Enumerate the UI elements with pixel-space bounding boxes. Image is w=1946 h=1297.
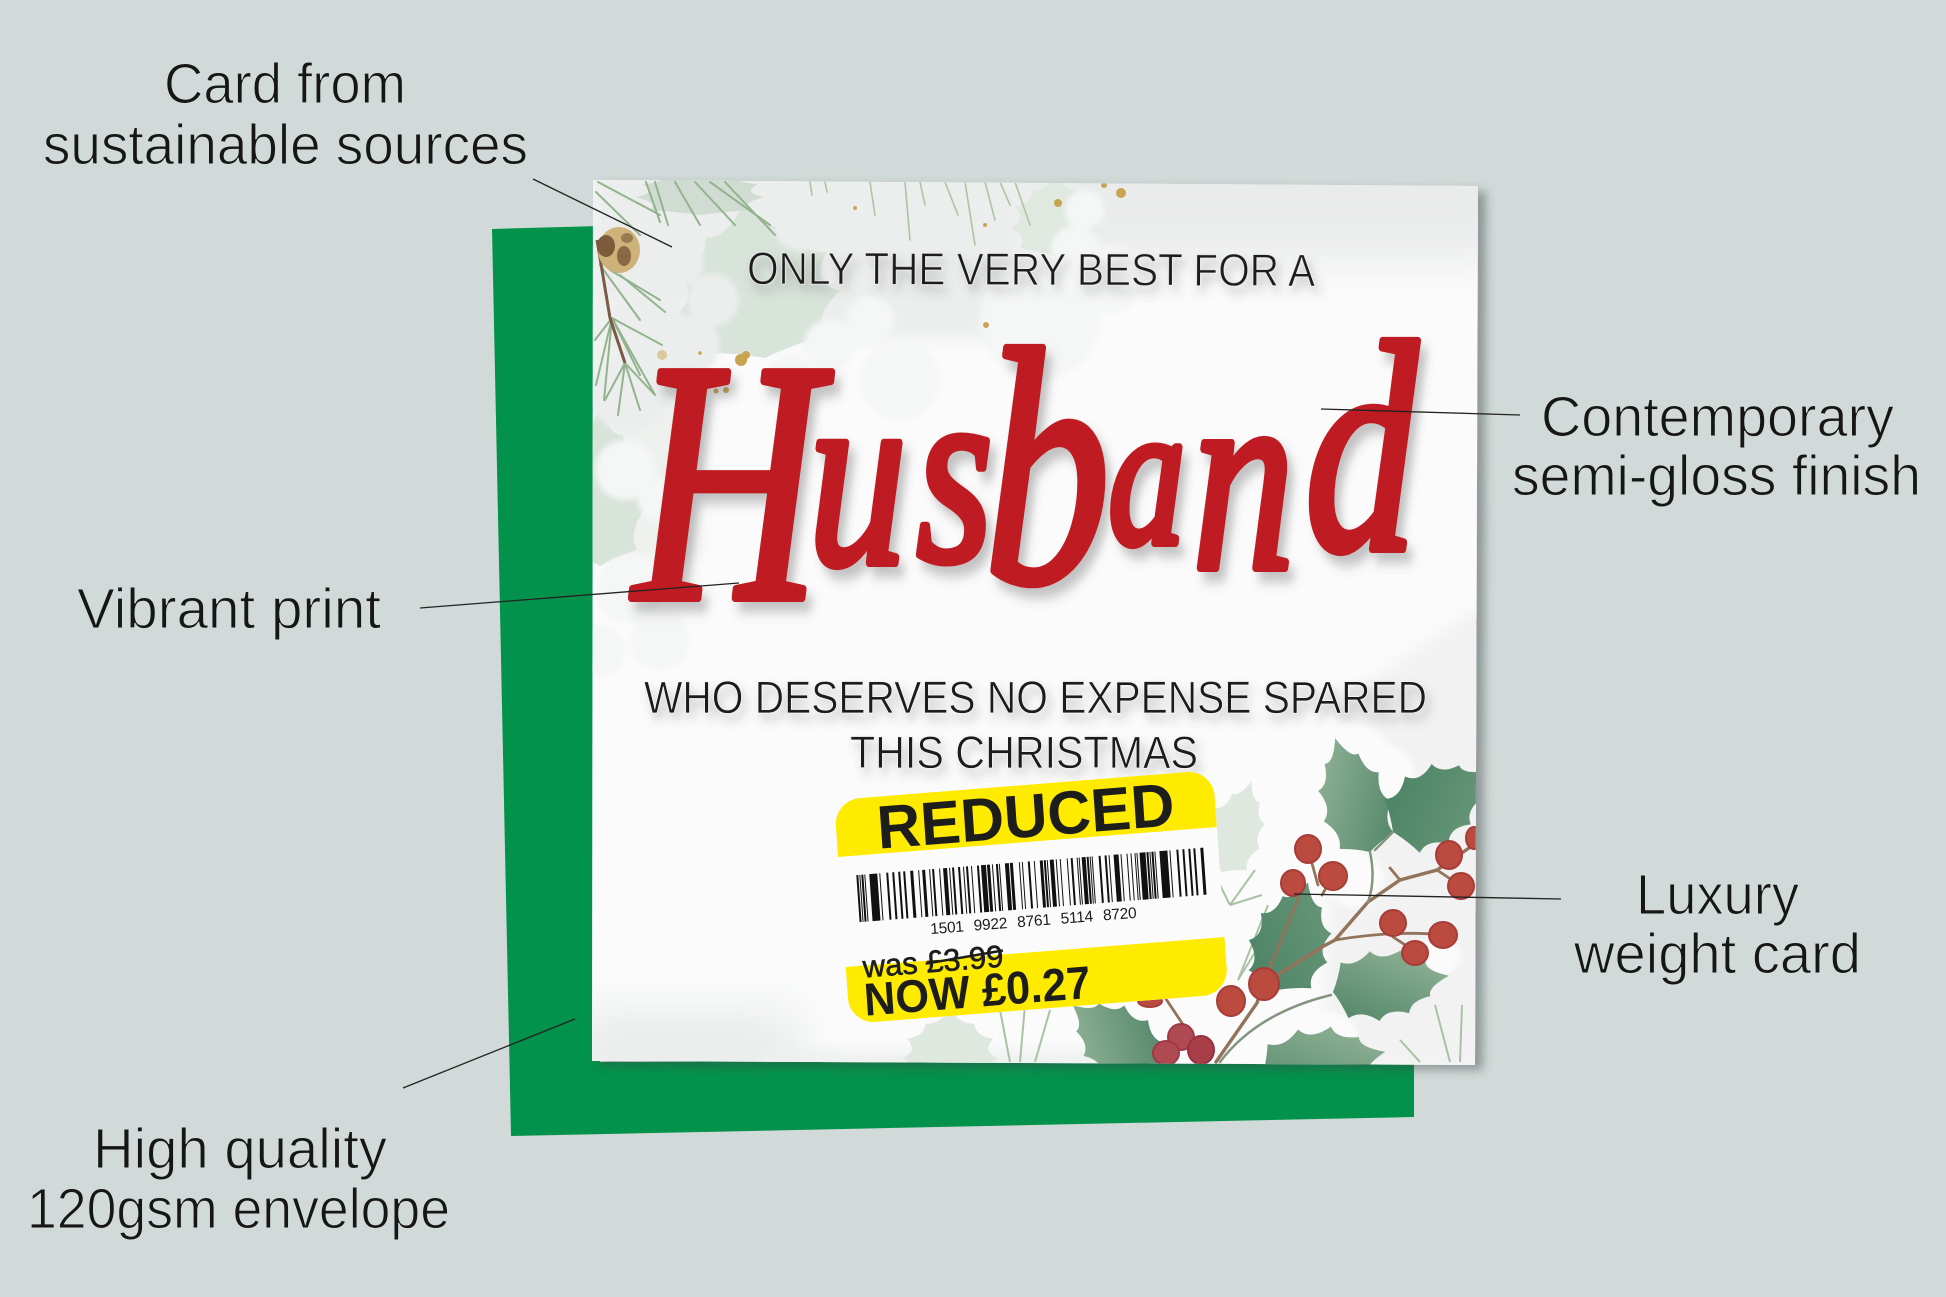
watercolour washes (554, 150, 1520, 1090)
branches (1160, 832, 1469, 1062)
pale background leaves (902, 773, 1279, 1085)
callout: contemporary semi-gloss finish: semi-gloss finish (1512, 444, 1921, 508)
callout: vibrant print (77, 577, 739, 641)
card text: Husband: b (984, 282, 1110, 655)
callout: card from sustainable sources: sustainable sources (43, 113, 528, 177)
callout: vibrant print: Vibrant print (77, 577, 381, 641)
card text: top line: ONLY THE VERY BEST FOR A (747, 243, 1315, 296)
callout: contemporary semi-gloss finish (1321, 385, 1921, 508)
reduced price sticker (834, 767, 1229, 1027)
callout: high quality 120gsm envelope: High quality (93, 1117, 387, 1181)
barcode number: 1501 9922 8761 5114 8720 (930, 905, 1138, 938)
callout: luxury weight card (1294, 863, 1861, 986)
barcode (858, 871, 1206, 899)
card text: Husband: s (916, 328, 993, 618)
previous price: was £3.99 (861, 939, 1005, 985)
green envelope (492, 226, 1414, 1136)
pine sprigs (595, 182, 775, 415)
pale green leaf shapes (554, 165, 1099, 566)
price strikethrough (925, 951, 1003, 964)
greeting card (592, 178, 1492, 1076)
callout: luxury weight card: Luxury (1636, 863, 1799, 927)
icon: pine cone (597, 227, 640, 273)
callout: contemporary semi-gloss finish: Contemporary (1541, 385, 1894, 449)
callout: card from sustainable sources (43, 52, 672, 247)
callout: luxury weight card: weight card (1573, 922, 1861, 986)
card text: lower lines (644, 672, 1427, 778)
card text: lower lines: WHO DESERVES NO EXPENSE SPARED (644, 672, 1427, 723)
pale pine needles (1000, 870, 1462, 1062)
card text: Husband: a (1108, 362, 1185, 588)
card text: Husband: H (630, 290, 836, 673)
gold flecks (657, 182, 1126, 394)
holly and berries illustration (902, 728, 1509, 1117)
card text: Husband: d (1305, 283, 1421, 615)
callout: high quality 120gsm envelope: 120gsm envelope (27, 1177, 450, 1241)
current price: NOW £0.27 (862, 956, 1092, 1026)
sticker heading: REDUCED (875, 770, 1177, 862)
card text: Husband: n (1193, 327, 1294, 628)
holly leaves (1050, 728, 1509, 1117)
callout: high quality 120gsm envelope (27, 1019, 575, 1241)
white halos around the holly (1316, 724, 1458, 1064)
white cloud shapes (592, 226, 808, 428)
card text: Husband: u (809, 331, 907, 621)
card text: lower lines: THIS CHRISTMAS (850, 727, 1198, 778)
berries (1138, 827, 1482, 1065)
callout: card from sustainable sources: Card from (164, 52, 406, 116)
